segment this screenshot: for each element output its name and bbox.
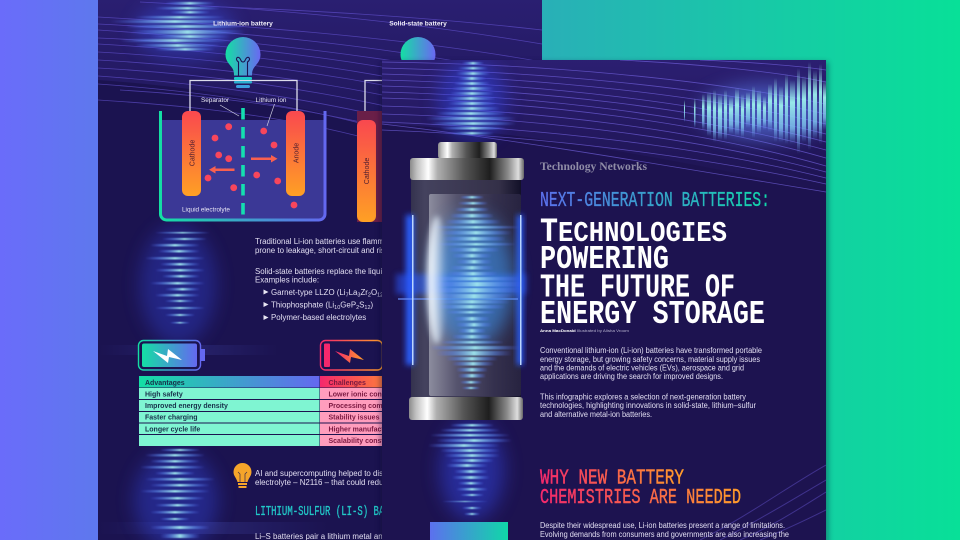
front page lower-right streaks <box>700 465 826 540</box>
front page shadow <box>380 62 828 540</box>
bullet list: solid electrolytes: 12 <box>377 292 383 298</box>
teal block at bottom of page <box>430 522 508 540</box>
front waveform above and below battery <box>426 62 516 515</box>
diagram title: Solid-state battery: Solid-state battery <box>389 20 447 28</box>
scope paragraph: This infographic explores a selection of next-generation battery <box>540 392 746 402</box>
scope paragraph <box>540 392 756 419</box>
intro paragraph: and the demands of electric vehicles (EVs), aerospace and grid <box>540 364 744 372</box>
label: lithium ion <box>256 97 287 126</box>
bullet list: solid electrolytes: 10 <box>334 305 340 311</box>
main title: POWERING <box>540 241 669 278</box>
main title <box>540 214 765 333</box>
main title: TECHNOLOGIES <box>540 214 727 252</box>
bullet list: solid electrolytes: Zr <box>360 288 368 297</box>
icon: low battery <box>320 340 382 370</box>
icon: lithium-ion light bulb <box>226 37 260 88</box>
bullet list: solid electrolytes: 2 <box>368 292 371 298</box>
table: advantages: High safety <box>145 392 183 398</box>
inner waveform glow <box>430 214 514 346</box>
section body text <box>540 521 790 539</box>
anode electrode <box>286 111 305 196</box>
section heading: why new battery chemistries are needed: CHEMISTRIES ARE NEEDED <box>540 487 741 510</box>
liquid electrolyte fill <box>160 120 325 220</box>
text block: lithium and solid-state explanation: Solid-state batteries replace the liquid with <box>255 267 403 276</box>
table: challenges: Scalability constraints <box>328 438 403 445</box>
text block: lithium and solid-state explanation <box>255 238 382 284</box>
lithium-ion cell <box>160 97 325 220</box>
arrow left <box>209 166 234 174</box>
separator <box>241 108 245 216</box>
table: advantages: Improved energy density <box>145 403 228 410</box>
table: advantages: Advantages <box>145 380 185 387</box>
bullet list: solid electrolytes: ) <box>383 288 386 297</box>
bullet list: solid electrolytes: ) <box>371 300 374 310</box>
main title: THE FUTURE OF <box>540 270 735 306</box>
back page: solid-state battery infographic page <box>98 0 542 540</box>
table: advantages <box>139 376 320 446</box>
table: challenges: Lower ionic conductivity <box>328 392 411 398</box>
front page: title page <box>382 60 830 540</box>
battery bottom collar <box>409 397 523 420</box>
bullet list: solid electrolytes: Thiophosphate (Li <box>271 300 334 310</box>
section body text: Despite their widespread use, Li-ion batteries present a range of limitations. <box>540 521 785 530</box>
battery top collar <box>410 158 524 180</box>
cathode electrode <box>182 111 201 196</box>
table: challenges: Challenges <box>328 380 366 387</box>
text block: lithium and solid-state explanation: Traditional Li-ion batteries use flammable <box>255 237 400 246</box>
intro paragraph: energy storage, but growing safety concerns, material supply issues <box>540 355 760 364</box>
label: liquid electrolyte: Liquid electrolyte <box>182 206 230 214</box>
lithium ions <box>205 123 297 208</box>
subtitle: next-generation batteries: NEXT-GENERATION BATTERIES: <box>540 190 770 213</box>
back page light streak background <box>98 0 542 540</box>
table: challenges: Stability issues <box>328 414 380 422</box>
icon: orange light bulb <box>234 463 252 488</box>
inner waveform <box>430 196 522 389</box>
arrow right <box>251 155 278 162</box>
label: lithium ion: Lithium ion <box>256 97 287 104</box>
glow behind front wave <box>438 60 506 140</box>
bullet list: solid electrolytes: S <box>359 300 364 310</box>
scope paragraph: technologies, highlighting innovations in solid-state, lithium–sulfur <box>540 401 756 410</box>
heading: lithium-sulfur batteries: LITHIUM-SULFUR (LI-S) BATTERIES <box>255 505 422 520</box>
logo: Technology Networks: Technology Networks <box>540 161 648 173</box>
label: separator: Separator <box>201 97 230 104</box>
table: advantages: Longer cycle life <box>145 426 200 434</box>
glass body <box>411 178 521 400</box>
bullet list: solid electrolytes: Garnet-type LLZO (Li <box>271 288 346 297</box>
section body text: Evolving demands from consumers and governments are also increasing the <box>540 530 790 539</box>
bullet list: solid electrolytes: 2 <box>356 305 359 311</box>
bullet list: solid electrolytes: 12 <box>364 305 371 311</box>
front page streak lines <box>382 60 826 192</box>
white left highlight <box>427 216 447 344</box>
intro paragraph <box>540 346 763 381</box>
intro paragraph: Conventional lithium-ion (Li-ion) batteries have transformed portable <box>540 346 763 355</box>
scope paragraph: and alternative metal-ion batteries. <box>540 410 652 419</box>
text block: lithium and solid-state explanation: prone to leakage, short-circuit and risk of <box>255 246 398 255</box>
bullet list: solid electrolytes: O <box>371 288 377 297</box>
icon: full battery <box>138 340 205 370</box>
bullet list: solid electrolytes: 3 <box>357 292 360 298</box>
callout text: AI discovery: AI and supercomputing helped to discover <box>255 469 403 478</box>
bullet list: solid electrolytes: Polymer-based electrolytes <box>271 313 366 322</box>
inner plate <box>429 194 521 396</box>
blue side glows <box>396 215 526 365</box>
bullet list: solid electrolytes: 7 <box>346 292 349 298</box>
bullet list: solid electrolytes: GeP <box>340 300 356 310</box>
section heading: why new battery chemistries are needed: WHY NEW BATTERY <box>540 468 684 490</box>
table: challenges: Higher manufacturing cost <box>328 426 418 434</box>
diagram title: Lithium-ion battery: Lithium-ion battery <box>213 20 273 28</box>
table: challenges: Processing complexity <box>328 403 405 410</box>
byline: Anna MacDonald Illustrated by Alisha Vroom <box>540 329 629 333</box>
bullet list: solid electrolytes <box>264 288 386 322</box>
intro paragraph: applications are driving the search for improved designs. <box>540 372 723 381</box>
main title: ENERGY STORAGE <box>540 296 765 333</box>
battery illustration <box>396 142 526 420</box>
battery top terminal <box>438 142 497 159</box>
table: advantages: Faster charging <box>145 414 198 422</box>
callout text: AI discovery <box>255 470 382 486</box>
section heading: why new battery chemistries are needed <box>540 468 741 510</box>
bullet list: solid electrolytes: La <box>349 288 358 297</box>
text block: lithium and solid-state explanation: Examples include: <box>255 276 319 284</box>
label: separator <box>201 97 239 116</box>
lithium-ion circuit wires <box>190 80 297 112</box>
anode electrode: Anode <box>294 143 300 163</box>
cathode electrode: Cathode <box>190 140 196 166</box>
solid-state cell (partly hidden): Cathode <box>364 158 371 184</box>
solid-state cell (partly hidden) <box>357 37 436 222</box>
table: challenges <box>320 376 382 446</box>
cell container <box>160 111 325 220</box>
callout text: AI discovery: electrolyte – N2116 – that could reduce <box>255 478 392 487</box>
top-right waveform <box>684 62 830 154</box>
